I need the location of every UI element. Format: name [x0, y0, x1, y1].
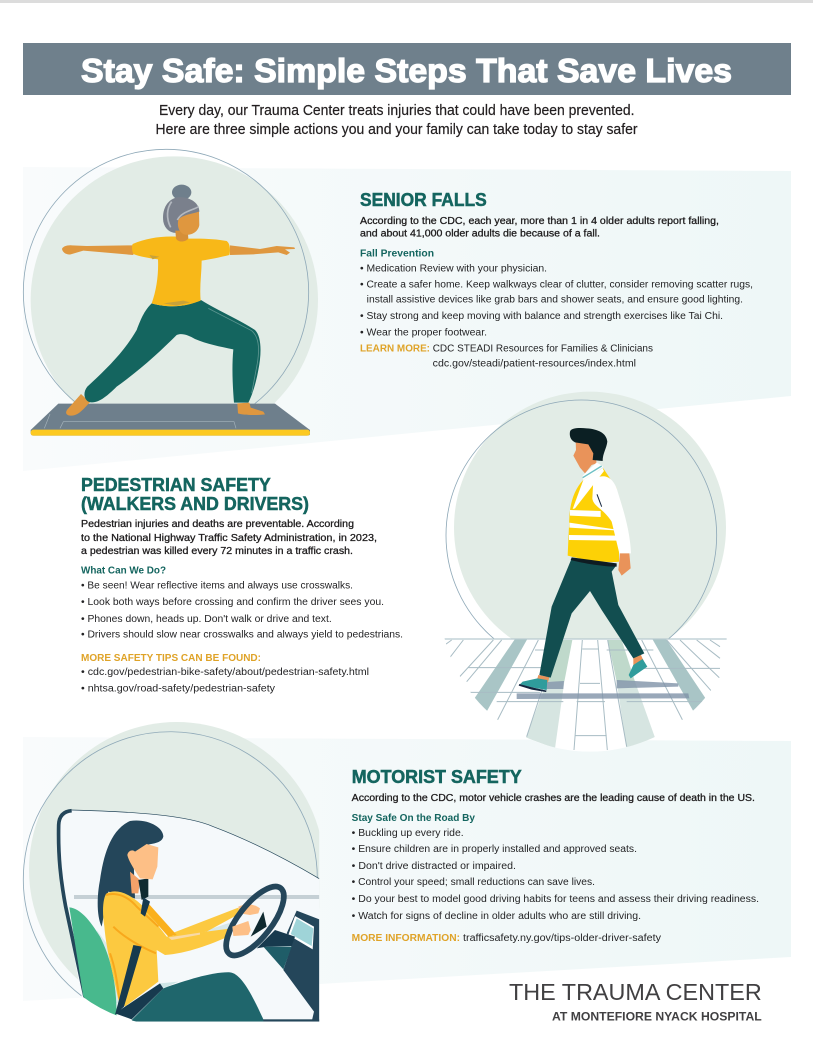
section: motorist safety text: Stay Safe On the Road By: [352, 813, 475, 824]
section: motorist safety text: According to the CDC, motor vehicle crashes are the leading cause of death in the US.: [352, 793, 755, 804]
section: motorist safety text: • Buckling up every ride.: [352, 828, 464, 839]
section: senior falls text: • Wear the proper footwear.: [360, 328, 487, 339]
section: pedestrian safety text: a pedestrian was killed every 72 minutes in a traffic crash.: [81, 546, 353, 557]
crosswalk: [444, 638, 727, 752]
section: pedestrian safety text: • Look both ways before crossing and confirm the driver sees you.: [81, 597, 384, 608]
intro text: Every day, our Trauma Center treats injuries that could have been prevented.: [159, 103, 634, 119]
section: senior falls text: [360, 190, 753, 370]
section: pedestrian safety text: PEDESTRIAN SAFETY: [81, 475, 271, 495]
section: motorist safety text: trafficsafety.ny.gov/tips-older-driver-safety: [463, 933, 661, 944]
woman figure: [62, 185, 295, 416]
driver figure: [98, 820, 294, 1022]
section: pedestrian safety text: • Drivers should slow near crosswalks and always yield to pedestrians.: [81, 630, 403, 641]
title banner: [23, 43, 791, 95]
illustration: woman driving a car: [23, 722, 324, 1022]
section: motorist safety text: • Don't drive distracted or impaired.: [352, 861, 516, 872]
section: motorist safety text: • Watch for signs of decline in older adults who are still driving.: [352, 911, 641, 922]
section: motorist safety text: [352, 767, 759, 944]
section: senior falls text: • Stay strong and keep moving with balance and strength exercises like Tai Chi.: [360, 311, 723, 322]
section: pedestrian safety text: • Be seen! Wear reflective items and always use crosswalks.: [81, 581, 353, 592]
section: senior falls text: cdc.gov/steadi/patient-resources/index.html: [433, 359, 636, 370]
section: pedestrian safety text: to the National Highway Traffic Safety Administration, in 2023,: [81, 533, 377, 544]
car interior: [57, 810, 319, 1022]
section: senior falls text: SENIOR FALLS: [360, 190, 487, 210]
section: senior falls text: CDC STEADI Resources for Families & Clinicians: [433, 344, 653, 355]
panel background: motorist safety: [23, 737, 791, 1001]
illustration: senior woman in yoga pose: [23, 149, 318, 444]
section: motorist safety text: • Ensure children are in properly installed and approved seats.: [352, 844, 637, 855]
section: pedestrian safety text: (WALKERS AND DRIVERS): [81, 494, 309, 514]
section: senior falls text: and about 41,000 older adults die because of a fall.: [360, 229, 600, 240]
section: pedestrian safety text: MORE SAFETY TIPS CAN BE FOUND:: [81, 653, 261, 664]
intro text: [156, 103, 638, 138]
logo: the trauma center: [509, 979, 762, 1024]
title banner: Stay Safe: Simple Steps That Save Lives: [81, 52, 732, 89]
man figure: [519, 428, 647, 692]
logo: the trauma center: THE TRAUMA CENTER: [509, 979, 762, 1005]
mat: [31, 404, 310, 436]
intro text: Here are three simple actions you and your family can take today to stay safer: [156, 122, 638, 138]
section: senior falls text: LEARN MORE:: [360, 344, 430, 355]
section: motorist safety text: • Do your best to model good driving habits for teens and assess their driving readiness.: [352, 894, 759, 905]
section: senior falls text: According to the CDC, each year, more than 1 in 4 older adults report falling,: [360, 216, 719, 227]
section: motorist safety text: MOTORIST SAFETY: [352, 767, 522, 787]
illustration: pedestrian in safety vest: [444, 392, 727, 752]
section: pedestrian safety text: What Can We Do?: [81, 566, 166, 577]
section: senior falls text: • Create a safer home. Keep walkways clear of clutter, consider removing scatter rugs,: [360, 280, 753, 291]
section: pedestrian safety text: Pedestrian injuries and deaths are preventable. According: [81, 519, 354, 530]
section: pedestrian safety text: [81, 475, 403, 695]
section: senior falls text: install assistive devices like grab bars and shower seats, and ensure good lighting.: [367, 295, 743, 306]
section: pedestrian safety text: • cdc.gov/pedestrian-bike-safety/about/pedestrian-safety.html: [81, 667, 369, 678]
section: pedestrian safety text: • nhtsa.gov/road-safety/pedestrian-safety: [81, 684, 275, 695]
section: senior falls text: • Medication Review with your physician.: [360, 264, 547, 275]
section: motorist safety text: MORE INFORMATION:: [352, 933, 460, 944]
panel background: senior falls: [23, 167, 791, 471]
logo: the trauma center: AT MONTEFIORE NYACK HOSPITAL: [552, 1010, 762, 1024]
section: pedestrian safety text: • Phones down, heads up. Don't walk or drive and text.: [81, 614, 332, 625]
section: senior falls text: Fall Prevention: [360, 249, 434, 260]
section: motorist safety text: • Control your speed; small reductions can save lives.: [352, 877, 595, 888]
